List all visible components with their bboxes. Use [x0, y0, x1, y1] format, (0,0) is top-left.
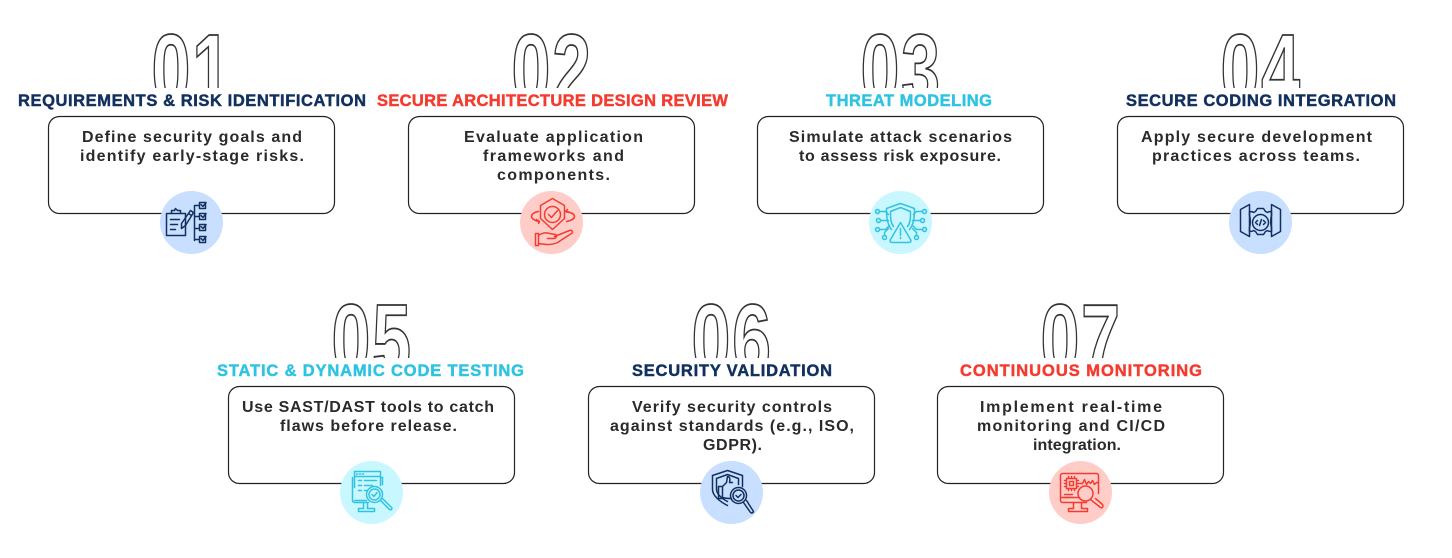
card 7 text: Implement real-time	[980, 399, 1162, 416]
card 1 text	[80, 129, 304, 165]
card 2	[408, 116, 694, 214]
card 2 text: Evaluate application	[464, 129, 643, 146]
card 7	[938, 386, 1224, 484]
step 5	[217, 285, 524, 524]
card 6 text: Verify security controls	[632, 399, 832, 416]
heading: code testing: STATIC & DYNAMIC CODE TESTING	[217, 362, 524, 380]
card 5 text: flaws before release.	[280, 418, 457, 435]
step 2	[377, 15, 728, 254]
number 07: 07	[1040, 285, 1120, 396]
heading: architecture: SECURE ARCHITECTURE DESIGN REVIEW	[377, 92, 728, 110]
card 3	[758, 116, 1044, 214]
number 04: 04	[1220, 15, 1300, 126]
card 4 text: practices across teams.	[1152, 148, 1360, 165]
card 5 text	[242, 399, 494, 435]
card 6 text	[610, 399, 854, 454]
number 05: 05	[332, 285, 411, 396]
heading: threat modeling: THREAT MODELING	[826, 92, 992, 110]
card 5 text: Use SAST/DAST tools to catch	[242, 399, 494, 416]
card 1 text: Define security goals and	[82, 129, 302, 146]
number 01: 01	[152, 15, 231, 126]
card 6	[588, 386, 874, 484]
icon: shield thumb magnifier	[700, 461, 763, 524]
icon: monitor with chip	[1049, 461, 1112, 524]
heading: requirements: REQUIREMENTS & RISK IDENTIFICATION	[18, 92, 366, 110]
card 4 text: Apply secure development	[1141, 129, 1373, 146]
step 7	[938, 285, 1224, 524]
card 3 text: Simulate attack scenarios	[789, 129, 1012, 146]
number 06: 06	[692, 285, 771, 396]
icon: shield network	[869, 191, 932, 254]
card 7 text	[977, 399, 1165, 454]
step 1	[18, 15, 366, 254]
icon: monitor and magnifier	[340, 461, 403, 524]
card 6 text: against standards (e.g., ISO,	[610, 418, 854, 435]
card 7 text: integration.	[1033, 437, 1121, 454]
icon: checklist	[160, 191, 223, 254]
card 4 text	[1141, 129, 1373, 165]
card 2 text: components.	[497, 167, 610, 184]
step 6	[588, 285, 874, 524]
heading: secure coding: SECURE CODING INTEGRATION	[1126, 92, 1396, 110]
heading: validation: SECURITY VALIDATION	[632, 362, 832, 380]
number 03: 03	[860, 15, 940, 126]
card 7 text: monitoring and CI/CD	[977, 418, 1165, 435]
card 6 text: GDPR).	[703, 437, 762, 454]
icon: shield in hand	[520, 191, 583, 254]
heading: monitoring: CONTINUOUS MONITORING	[960, 362, 1202, 380]
step 4	[1118, 15, 1404, 254]
card 2 text	[464, 129, 643, 184]
icon: code gear	[1229, 191, 1292, 254]
number 02: 02	[512, 15, 591, 126]
card 3 text: to assess risk exposure.	[799, 148, 1001, 165]
card 1	[48, 116, 334, 214]
step 3	[758, 15, 1044, 254]
card 1 text: identify early-stage risks.	[80, 148, 304, 165]
card 3 text	[789, 129, 1012, 165]
card 5	[228, 386, 514, 484]
card 2 text: frameworks and	[483, 148, 624, 165]
card 4	[1118, 116, 1404, 214]
